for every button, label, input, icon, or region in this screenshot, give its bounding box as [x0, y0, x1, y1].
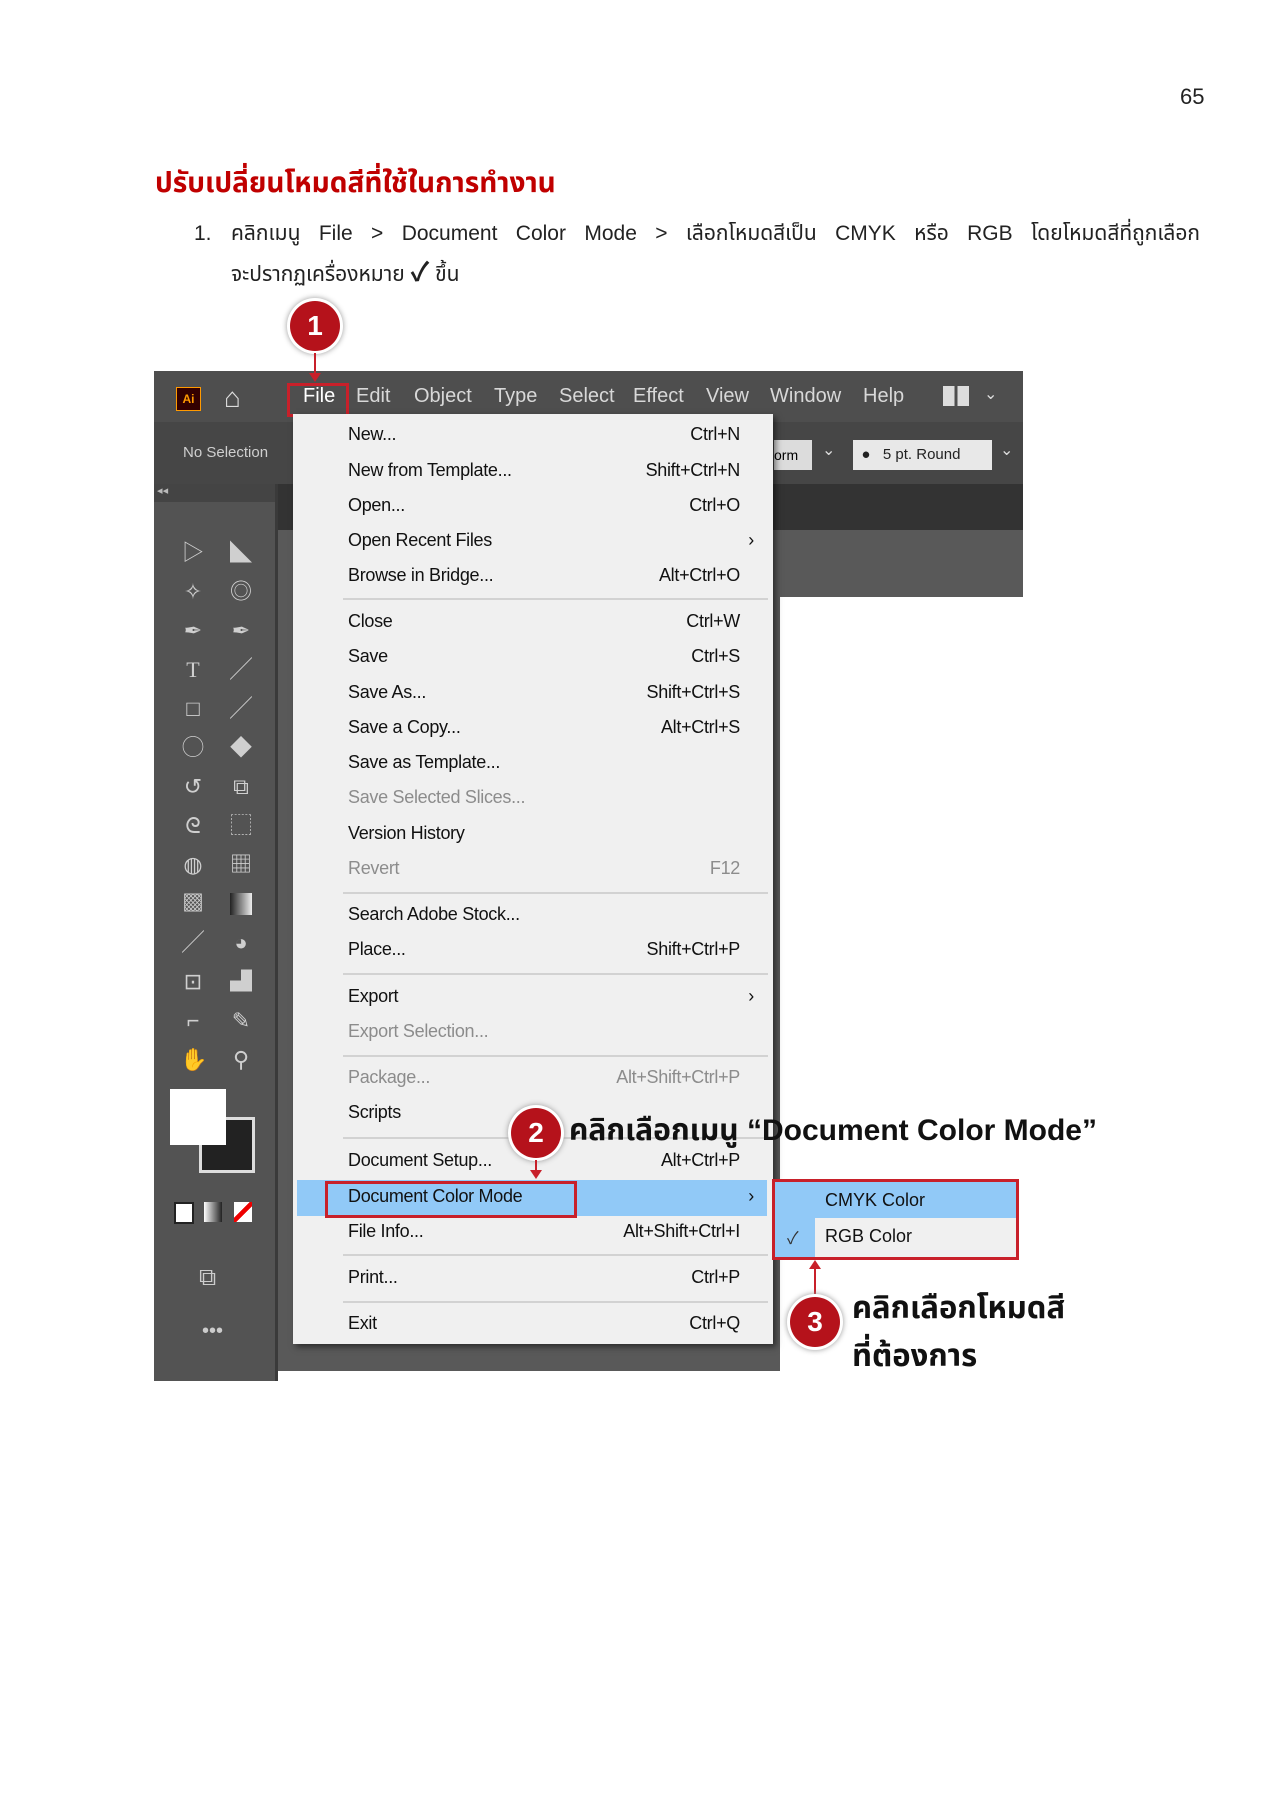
File red highlight box [287, 383, 349, 417]
tool icons: ⧉ [233, 774, 249, 799]
menu items: Ctrl+S [691, 646, 740, 666]
text: View [706, 385, 749, 407]
menu items: Alt+Shift+Ctrl+P [616, 1067, 740, 1087]
submenu: color modes: CMYK Color [825, 1190, 925, 1210]
menu items: Version History [348, 823, 465, 843]
menu items: Package... [348, 1067, 430, 1087]
red box: Document Color Mode [325, 1181, 577, 1218]
step 1 marker [284, 294, 346, 382]
tool icons: ↺ [184, 774, 202, 799]
dark strip [154, 484, 1023, 530]
tool icons: ⬚ [230, 813, 252, 838]
instruction text [194, 218, 1200, 287]
tool icons: ⚲ [233, 1047, 249, 1072]
step 2 marker and callout [504, 1102, 1097, 1179]
tool icons: ✎ [232, 1008, 250, 1033]
tool icons: ╱ [230, 696, 252, 721]
menu items: Save Selected Slices... [348, 787, 525, 807]
menu items: New from Template... [348, 460, 512, 480]
highlighted row: Document Color Mode [297, 1180, 767, 1216]
menu items: Open... [348, 495, 405, 515]
tool icons: ◆ [230, 735, 252, 760]
left toolbar: ••• [202, 1320, 223, 1342]
title: ปรับเปลี่ยนโหมดสีที่ใช้ในการทำงาน [155, 167, 556, 198]
menu items: Alt+Ctrl+S [661, 717, 740, 737]
File dropdown menu [293, 414, 773, 1344]
menu items: New... [348, 424, 396, 444]
menu bar items [303, 385, 904, 407]
tool icons: ▩ [182, 891, 204, 916]
text: Help [863, 385, 904, 407]
text: Effect [633, 385, 684, 407]
menu items: Print... [348, 1267, 398, 1287]
menu items: Ctrl+P [691, 1267, 740, 1287]
menu items: Place... [348, 939, 406, 959]
text: › [748, 530, 754, 550]
menu items: Shift+Ctrl+N [646, 460, 740, 480]
menu items: Ctrl+N [690, 424, 740, 444]
tool icons: ✋ [180, 1047, 207, 1072]
submenu: color modes [775, 1182, 1016, 1257]
step 3 marker and callout: คลิกเลือกโหมดสี [852, 1290, 1065, 1325]
control bar content: ⌄ [1000, 442, 1013, 459]
icon: Ai logo [176, 387, 201, 411]
step 1 marker: 1 [307, 310, 323, 341]
screenshot: illustrator window [154, 371, 1023, 1371]
menu items: Shift+Ctrl+P [647, 939, 740, 959]
menu items: Open Recent Files [348, 530, 492, 550]
menu items: File Info... [348, 1221, 423, 1241]
left toolbar [154, 484, 278, 1381]
menu items: Ctrl+O [689, 495, 740, 515]
menu items: Export Selection... [348, 1021, 488, 1041]
tool icons: ╱ [230, 657, 252, 682]
canvas area [154, 530, 1023, 597]
tool icons: ╱ [182, 930, 204, 955]
icon: home: ⌂ [224, 382, 241, 413]
tool icons: ◍ [183, 852, 203, 877]
tool icons: ✒ [232, 618, 250, 643]
submenu: color modes: RGB Color [825, 1226, 912, 1246]
menu items: Search Adobe Stock... [348, 904, 520, 924]
menu items: Ctrl+Q [689, 1313, 740, 1333]
tool icons: ✧ [184, 579, 202, 604]
menu items: Alt+Ctrl+O [659, 565, 740, 585]
menu items: Document Color Mode [348, 1186, 522, 1206]
step 2 marker and callout: 2 [528, 1117, 544, 1148]
instruction text: จะปรากฏเครื่องหมาย ✓ ขึ้น [231, 257, 460, 287]
text: › [748, 1186, 754, 1206]
step 3 marker and callout: 3 [807, 1306, 823, 1337]
left toolbar: ◂◂ [157, 485, 168, 497]
tool icons: T [186, 657, 200, 682]
menu items: Alt+Shift+Ctrl+I [623, 1221, 740, 1241]
tool icons: ◕ [234, 930, 248, 955]
menu items: Ctrl+W [686, 611, 740, 631]
instruction text: 1. [194, 222, 212, 245]
icon: Ai logo: Ai [182, 392, 194, 406]
tool icons: □ [186, 696, 200, 721]
tool icons: ◎ [230, 579, 252, 604]
step 2 marker and callout: คลิกเลือกเมนู “Document Color Mode” [569, 1114, 1097, 1147]
text: › [748, 986, 754, 1006]
menu items: Scripts [348, 1102, 401, 1122]
tool icons: ◣ [230, 540, 252, 565]
page number: 65 [1180, 84, 1204, 109]
text: File [303, 385, 335, 407]
menu items [343, 424, 768, 1333]
menu items: Revert [348, 858, 399, 878]
tool icons: ⌐ [187, 1008, 199, 1033]
tool icons: ⊡ [184, 969, 202, 994]
menu items: Browse in Bridge... [348, 565, 493, 585]
menu items: Save as Template... [348, 752, 500, 772]
control bar content: ⌄ [822, 442, 835, 459]
step 3 marker and callout: ที่ต้องการ [852, 1338, 977, 1373]
left toolbar: ⧉ [199, 1264, 216, 1291]
menu items: Close [348, 611, 393, 631]
text: Select [559, 385, 615, 407]
text: Window [770, 385, 841, 407]
tool icons: ▷ [182, 540, 204, 565]
icon: workspace [943, 386, 969, 406]
text: ⌄ [984, 386, 997, 403]
menu items: Save a Copy... [348, 717, 461, 737]
control bar content [183, 440, 1013, 470]
text: Edit [356, 385, 390, 407]
submenu: color modes: ✓ [787, 1229, 799, 1248]
menu items: Document Setup... [348, 1150, 492, 1170]
tool icons: ▦ [230, 852, 252, 877]
menu items: Alt+Ctrl+P [661, 1150, 740, 1170]
menu items: Shift+Ctrl+S [647, 682, 740, 702]
instruction text: คลิกเมนู File > Document Color Mode > เลือกโหมดสีเป็น CMYK หรือ RGB โดยโหมดสีที่ถูกเลือก [231, 222, 1200, 245]
tool icons: ▟ [230, 969, 252, 994]
menu items: Save [348, 646, 388, 666]
menu items: Exit [348, 1313, 377, 1333]
tool icons: ᘓ [185, 813, 201, 838]
menu items: F12 [710, 858, 740, 878]
text: Object [414, 385, 472, 407]
menu items: Save As... [348, 682, 426, 702]
tool icons: ✒ [184, 618, 202, 643]
tool icons: ◯ [182, 735, 204, 760]
step 3 marker and callout [784, 1260, 1065, 1373]
text: Type [494, 385, 537, 407]
menu items: Export [348, 986, 398, 1006]
tool icons [180, 540, 252, 1072]
control bar content: orm [774, 447, 798, 463]
menu bar [154, 371, 1023, 422]
control bar content: ● 5 pt. Round [861, 446, 960, 463]
control bar content: No Selection [183, 444, 268, 461]
fill and stroke swatches [199, 1117, 255, 1173]
control bar [154, 422, 1023, 484]
